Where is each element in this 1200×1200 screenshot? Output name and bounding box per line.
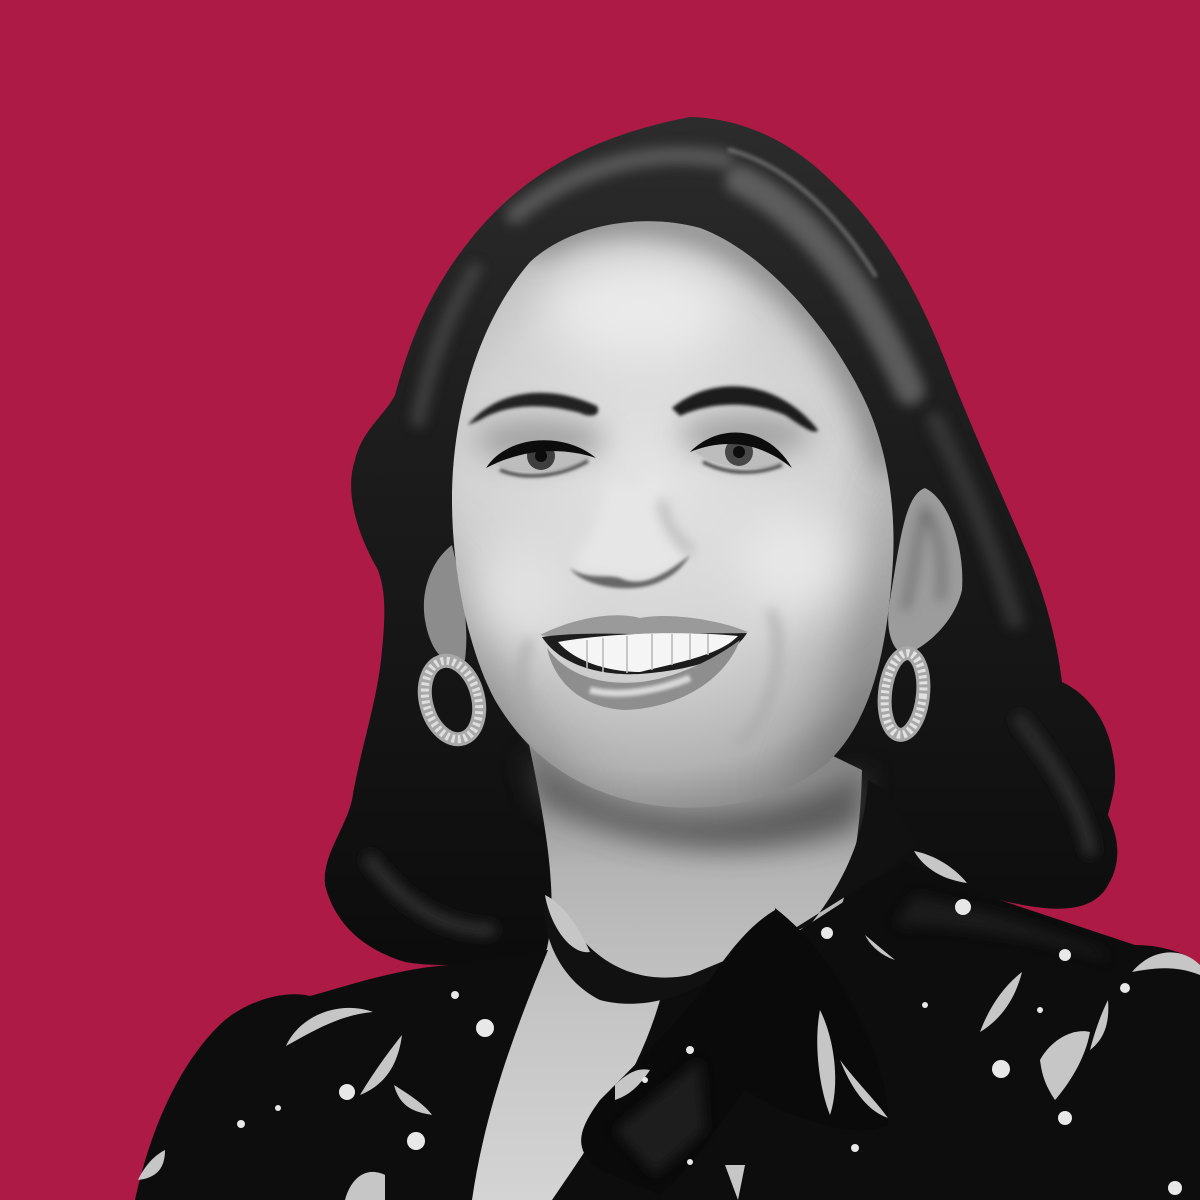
- blouse print: [138, 851, 1200, 1200]
- face shading: [454, 540, 585, 782]
- left eye: [486, 440, 596, 476]
- left eyebrow: [468, 393, 598, 425]
- face: [430, 221, 900, 808]
- dots: [237, 899, 1182, 1195]
- nose: [570, 470, 692, 588]
- neck and chest: [470, 740, 866, 1200]
- left earring: [417, 655, 487, 745]
- right ear: [888, 488, 962, 655]
- blouse: [135, 780, 1200, 1200]
- teeth: [558, 633, 738, 672]
- right eyebrow: [672, 386, 818, 432]
- right earring: [881, 651, 927, 737]
- eye socket shadows: [475, 418, 605, 462]
- hair: [325, 117, 1117, 965]
- right eye: [690, 432, 792, 472]
- smile lines: [522, 610, 778, 745]
- hair highlights: [370, 150, 1090, 930]
- collar tie band: [544, 780, 918, 1004]
- bow: [581, 908, 888, 1195]
- left ear: [424, 545, 466, 663]
- leaves: [138, 851, 1200, 1200]
- mouth: [540, 615, 748, 710]
